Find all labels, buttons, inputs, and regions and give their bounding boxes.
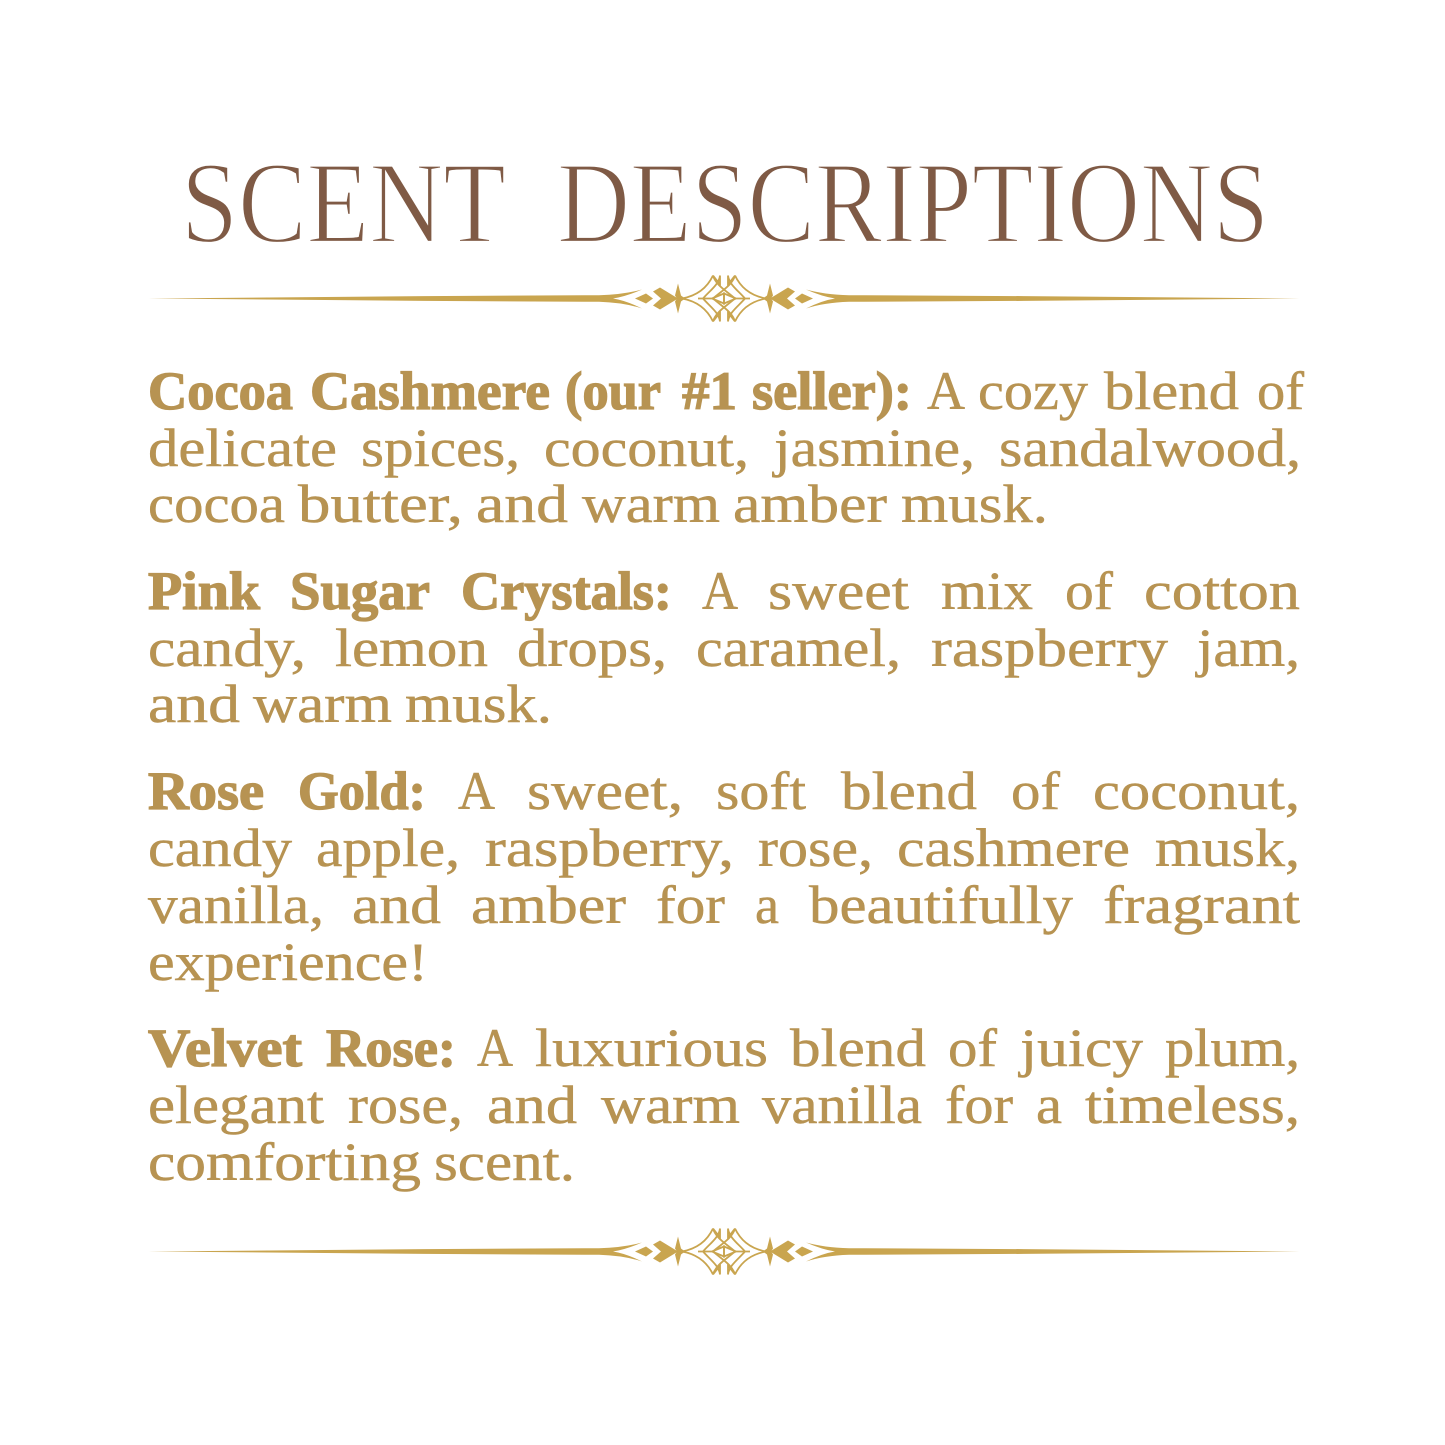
- scent: Cocoa Cashmere: [148, 361, 1304, 534]
- description: Rose Gold: fragrant: [1103, 875, 1300, 935]
- description: Velvet Rose: luxurious: [535, 1018, 768, 1078]
- description: Cocoa Cashmere: warm: [582, 474, 720, 534]
- description: Cocoa Cashmere: [148, 361, 1304, 534]
- description: Rose Gold: of: [1011, 761, 1060, 821]
- description: Velvet Rose: vanilla: [762, 1075, 922, 1135]
- title: SCENT: [181, 139, 506, 268]
- description: Velvet Rose: of: [948, 1018, 997, 1078]
- description: Cocoa Cashmere: amber: [733, 474, 887, 534]
- description: Pink Sugar Crystals: raspberry: [931, 618, 1168, 678]
- description: Pink Sugar Crystals: and: [148, 674, 240, 734]
- description: Rose Gold: rose,: [758, 818, 873, 878]
- description: Cocoa Cashmere: spices,: [361, 418, 520, 478]
- description: Rose Gold: and: [352, 875, 441, 935]
- description: Velvet Rose: and: [487, 1075, 577, 1135]
- description: Rose Gold: a: [755, 875, 779, 935]
- scent: Velvet Rose: [148, 1018, 1300, 1192]
- description: Rose Gold: experience!: [148, 932, 428, 992]
- description: Pink Sugar Crystals: of: [1065, 561, 1113, 621]
- description: Cocoa Cashmere: delicate: [148, 418, 337, 478]
- description: Cocoa Cashmere: butter,: [298, 474, 463, 534]
- description: Velvet Rose: A: [477, 1018, 513, 1078]
- description: Cocoa Cashmere: sandalwood,: [999, 418, 1301, 478]
- description: Pink Sugar Crystals: candy,: [148, 618, 306, 678]
- description: Pink Sugar Crystals: drops,: [517, 618, 667, 678]
- scent: Rose Gold: [148, 761, 1300, 992]
- description: Cocoa Cashmere: of: [1257, 361, 1304, 421]
- description: Rose Gold: for: [656, 875, 725, 935]
- description: Velvet Rose: for: [945, 1075, 1013, 1135]
- description: Pink Sugar Crystals: musk.: [405, 674, 552, 734]
- description: Rose Gold: beautifully: [809, 875, 1073, 935]
- name: Rose Gold: Rose: [148, 761, 264, 821]
- description: Rose Gold: amber: [471, 875, 626, 935]
- description: Velvet Rose: a: [1036, 1075, 1062, 1135]
- name: Cocoa Cashmere: Cocoa: [148, 361, 293, 421]
- name: Pink Sugar Crystals: Sugar: [290, 561, 430, 621]
- description: Velvet Rose: juicy: [1018, 1018, 1143, 1078]
- description: Rose Gold: cashmere: [897, 818, 1130, 878]
- title: [181, 139, 1269, 268]
- description: Rose Gold: coconut,: [1093, 761, 1300, 821]
- description: Velvet Rose: warm: [601, 1075, 740, 1135]
- description: Cocoa Cashmere: blend: [1104, 361, 1239, 421]
- description: Rose Gold: apple,: [316, 818, 460, 878]
- description: Pink Sugar Crystals: sweet: [768, 561, 909, 621]
- description: Rose Gold: A: [458, 761, 495, 821]
- description: Cocoa Cashmere: A: [927, 361, 965, 421]
- top ornamental divider: [148, 276, 1300, 322]
- description: Velvet Rose: [148, 1018, 1300, 1192]
- title: DESCRIPTIONS: [557, 139, 1269, 268]
- description: Pink Sugar Crystals: lemon: [335, 618, 488, 678]
- description: Velvet Rose: scent.: [434, 1132, 575, 1192]
- description: Rose Gold: musk,: [1155, 818, 1300, 878]
- description: Rose Gold: [148, 761, 1300, 992]
- description: Pink Sugar Crystals: caramel,: [696, 618, 901, 678]
- description: Rose Gold: raspberry,: [485, 818, 734, 878]
- description: Velvet Rose: timeless,: [1085, 1075, 1300, 1135]
- bottom ornamental divider: [148, 1228, 1300, 1274]
- name: Rose Gold: Gold:: [298, 761, 426, 821]
- name: Cocoa Cashmere: seller):: [752, 361, 912, 421]
- description: Velvet Rose: rose,: [348, 1075, 463, 1135]
- description: Pink Sugar Crystals: [148, 561, 1300, 734]
- description: Cocoa Cashmere: cocoa: [148, 474, 285, 534]
- scent: Pink Sugar Crystals: [148, 561, 1300, 734]
- description: Rose Gold: sweet,: [527, 761, 683, 821]
- description: Pink Sugar Crystals: A: [702, 561, 738, 621]
- name: Velvet Rose: Velvet: [148, 1018, 302, 1078]
- description: Velvet Rose: plum,: [1165, 1018, 1300, 1078]
- name: Pink Sugar Crystals: Crystals:: [461, 561, 672, 621]
- description: Cocoa Cashmere: cozy: [978, 361, 1088, 421]
- description: Velvet Rose: elegant: [148, 1075, 324, 1135]
- description: Cocoa Cashmere: coconut,: [544, 418, 749, 478]
- description: Rose Gold: candy: [148, 818, 292, 878]
- name: Cocoa Cashmere: (our: [565, 361, 661, 421]
- name: Cocoa Cashmere: #1: [682, 361, 737, 421]
- description: Rose Gold: soft: [716, 761, 806, 821]
- description: Cocoa Cashmere: and: [476, 474, 568, 534]
- description: Cocoa Cashmere: jasmine,: [772, 418, 975, 478]
- name: Cocoa Cashmere: Cashmere: [310, 361, 550, 421]
- description: Pink Sugar Crystals: warm: [253, 674, 392, 734]
- description: Rose Gold: blend: [841, 761, 977, 821]
- name: Pink Sugar Crystals: Pink: [148, 561, 260, 621]
- description: Pink Sugar Crystals: cotton: [1144, 561, 1300, 621]
- description: Velvet Rose: comforting: [148, 1132, 421, 1192]
- description: Pink Sugar Crystals: jam,: [1195, 618, 1300, 678]
- description: Pink Sugar Crystals: mix: [941, 561, 1033, 621]
- description: Cocoa Cashmere: musk.: [901, 474, 1048, 534]
- description: Velvet Rose: blend: [790, 1018, 926, 1078]
- name: Velvet Rose: Rose:: [326, 1018, 456, 1078]
- description: Rose Gold: vanilla,: [148, 875, 324, 935]
